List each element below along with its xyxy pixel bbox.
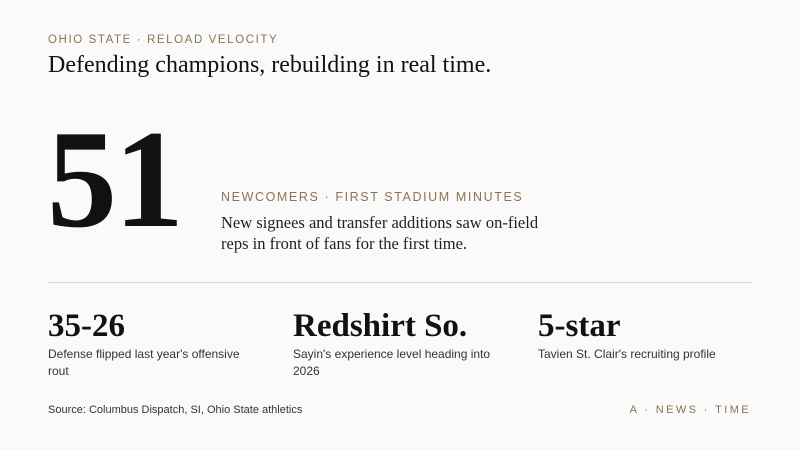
brand: A · NEWS · TIME [630,404,751,416]
stat: 35-26: 35-26 [48,308,125,344]
stat: 5-star: Tavien St. Clair's recruiting profile [538,347,716,361]
stat: Redshirt So.: Sayin's experience level heading into 2026 [293,347,490,378]
stat: Redshirt So.: Redshirt So. [293,308,467,344]
big number label: NEWCOMERS · FIRST STADIUM MINUTES [221,190,523,204]
stat: 5-star [538,308,716,361]
source: Source: Columbus Dispatch, SI, Ohio State athletics [48,404,302,416]
stat: 5-star: 5-star [538,308,620,344]
kicker: OHIO STATE · RELOAD VELOCITY [48,34,278,46]
stat: Redshirt So. [293,308,490,378]
big number: 51 [47,102,181,257]
big number description: New signees and transfer additions saw on-field reps in front of fans for the first time. [221,213,538,253]
title: Defending champions, rebuilding in real time. [48,52,491,78]
stat: 35-26: Defense flipped last year's offensive rout [48,347,240,378]
stat: 35-26 [48,308,240,378]
